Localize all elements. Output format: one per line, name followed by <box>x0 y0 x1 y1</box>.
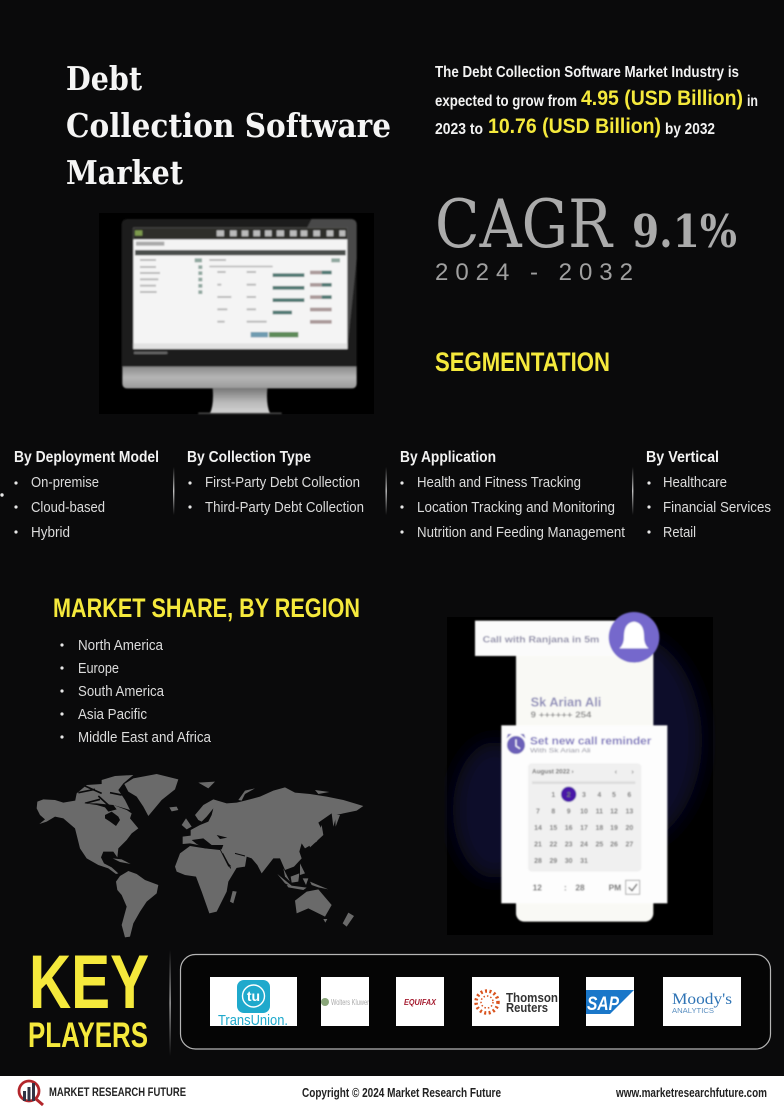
key players heading: PLAYERS <box>28 1016 148 1055</box>
phone reminder image: 9 ++++++ 254 <box>531 709 592 719</box>
market size text block: 10.76 (USD Billion) <box>488 115 661 138</box>
footer brand: MARKET RESEARCH FUTURE <box>49 1085 186 1099</box>
phone reminder image: 4 <box>597 792 601 799</box>
segment: by application: Nutrition and Feeding Management <box>417 524 626 541</box>
phone reminder image: 22 <box>549 842 557 849</box>
market size text block: expected to grow from <box>435 93 577 110</box>
svalbard <box>198 782 215 788</box>
region list: Asia Pacific <box>78 706 147 723</box>
market size text block: The Debt Collection Software Market Industry is <box>435 64 739 81</box>
time picker <box>533 883 621 893</box>
phone reminder image: 18 <box>595 825 603 832</box>
logo: thomson reuters: Reuters <box>506 1001 548 1015</box>
arctic islands <box>75 775 133 810</box>
phone reminder image: 19 <box>610 825 618 832</box>
phone reminder image: › <box>631 767 634 776</box>
key players panel <box>180 954 770 1049</box>
segment: by deployment model: Hybrid <box>31 524 70 541</box>
calendar <box>528 763 641 872</box>
phone reminder image: 16 <box>565 825 573 832</box>
phone reminder image: 26 <box>610 842 618 849</box>
logo: transunion <box>210 977 297 1029</box>
market size text block: 4.95 (USD Billion) <box>581 87 743 110</box>
bell icon <box>609 612 659 663</box>
phone reminder image: 15 <box>549 825 557 832</box>
phone reminder image: 29 <box>549 858 557 865</box>
key players heading: KEY <box>29 940 149 1025</box>
segment: by deployment model <box>0 449 159 541</box>
logo: thomson reuters <box>472 977 559 1026</box>
new zealand <box>343 913 354 927</box>
novaya zemlya <box>238 788 255 801</box>
caribbean <box>113 858 131 864</box>
tasmania <box>323 919 327 923</box>
segment: by collection type <box>187 449 364 516</box>
eurasia <box>183 787 363 873</box>
phone reminder image: 31 <box>580 858 588 865</box>
phone reminder image: 20 <box>625 825 633 832</box>
region list: South America <box>78 683 165 700</box>
alarm icon <box>507 736 525 754</box>
logo: moody's analytics: Moody's <box>672 991 732 1008</box>
CAGR figure: CAGR <box>435 186 614 263</box>
logo: wolters kluwer: Wolters Kluwer <box>331 998 369 1007</box>
phone reminder image: 21 <box>534 842 542 849</box>
north america <box>37 799 138 874</box>
logo: sap: SAP <box>587 994 619 1015</box>
segment: by application <box>400 449 626 541</box>
sakhalin <box>335 815 340 827</box>
phone reminder image: 8 <box>551 808 555 815</box>
hudson bay <box>105 812 120 826</box>
madagascar <box>230 891 237 903</box>
contact name: Sk Arian Ali <box>531 696 601 710</box>
monitor screen <box>133 228 347 349</box>
time picker: 28 <box>575 883 585 893</box>
segment: by application: By Application <box>400 449 496 466</box>
segment: by application: Health and Fitness Tracking <box>417 474 581 491</box>
phone reminder image: 23 <box>565 842 573 849</box>
segment: by vertical: Healthcare <box>663 474 727 491</box>
seas <box>192 835 227 849</box>
title <box>66 59 391 192</box>
market size text block <box>435 64 758 138</box>
region list: Middle East and Africa <box>78 729 212 746</box>
region list: North America <box>78 637 164 654</box>
monitor chin <box>122 367 357 388</box>
title: Collection Software <box>66 106 391 145</box>
world map <box>37 774 363 937</box>
market size text block: in <box>747 93 758 110</box>
phone reminder image: August 2022 › <box>532 770 574 776</box>
phone reminder image: 25 <box>595 842 603 849</box>
heading: segmentation: SEGMENTATION <box>435 347 610 377</box>
heading: market share by region: MARKET SHARE, BY REGION <box>53 593 360 623</box>
CAGR figure: 2024 - 2032 <box>435 259 633 286</box>
region list <box>60 637 212 746</box>
CAGR figure: 9.1% <box>632 205 737 258</box>
phone reminder image: 27 <box>625 842 633 849</box>
segment: by vertical: Retail <box>663 524 696 541</box>
greenland <box>124 774 178 816</box>
logo: transunion: TransUnion. <box>218 1012 288 1029</box>
phone reminder image: 11 <box>596 808 603 815</box>
title: Market <box>66 153 184 192</box>
logo: wolters kluwer <box>321 977 369 1026</box>
logo: moody's analytics: ANALYTICS <box>672 1006 714 1015</box>
segment: by deployment model: By Deployment Model <box>14 449 159 466</box>
phone reminder image: 10 <box>580 808 588 815</box>
logo: equifax <box>396 977 444 1026</box>
footer copyright: Copyright © 2024 Market Research Future <box>302 1086 501 1100</box>
segment: by deployment model: Cloud-based <box>31 499 105 516</box>
phone reminder image: Call with Ranjana in 5m <box>483 635 599 645</box>
reminder card <box>501 725 667 903</box>
logo: sap <box>586 977 634 1026</box>
phone reminder image <box>447 612 713 935</box>
phone reminder image: 24 <box>580 842 588 849</box>
britain <box>182 818 192 829</box>
monitor image <box>99 213 374 414</box>
australia <box>295 889 332 917</box>
monitor bezel <box>122 219 357 367</box>
phone reminder image: 17 <box>580 825 588 832</box>
segment: by vertical: By Vertical <box>646 449 719 466</box>
phone reminder image: 13 <box>625 808 633 815</box>
key players heading <box>28 940 149 1055</box>
logo: thomson reuters: Thomson <box>506 991 558 1005</box>
phone reminder image: 3 <box>582 792 586 799</box>
indonesia and philippines <box>277 863 328 890</box>
phone reminder image: 5 <box>612 792 616 799</box>
south america <box>116 871 158 937</box>
time picker: PM <box>609 883 621 893</box>
phone reminder image: 9 <box>567 808 571 815</box>
phone reminder image: 14 <box>534 825 542 832</box>
phone reminder image: 12 <box>610 808 618 815</box>
malay peninsula <box>283 868 290 882</box>
phone reminder image: 6 <box>627 792 631 799</box>
logo: equifax: EQUIFAX <box>404 998 437 1007</box>
CAGR figure <box>435 186 737 286</box>
segment: by collection type: First-Party Debt Collection <box>205 474 360 491</box>
phone reminder image: Set new call reminder <box>530 735 652 747</box>
region list: Europe <box>78 660 119 677</box>
africa <box>175 846 238 913</box>
phone reminder image: 30 <box>565 858 573 865</box>
time picker: 12 <box>533 883 542 893</box>
iceland <box>169 807 178 811</box>
logo: transunion: tu <box>247 988 260 1004</box>
segment: by deployment model: On-premise <box>31 474 99 491</box>
phone body <box>516 643 653 922</box>
footer <box>0 1076 784 1108</box>
japan <box>308 825 323 847</box>
phone reminder image: With Sk Arian Ali <box>530 748 591 755</box>
monitor stand <box>210 388 270 413</box>
phone reminder image: 28 <box>534 858 542 865</box>
segment: by vertical: Financial Services <box>663 499 771 516</box>
segment: by application: Location Tracking and Monitoring <box>417 499 615 516</box>
segment: by vertical <box>646 449 771 541</box>
east arctic island <box>315 790 329 794</box>
title: Debt <box>66 59 143 98</box>
footer logo icon <box>19 1081 43 1105</box>
market size text block: 2023 to <box>435 121 483 138</box>
segment: by collection type: Third-Party Debt Collection <box>205 499 364 516</box>
logo: moody's analytics <box>663 977 741 1026</box>
phone reminder image: ‹ <box>615 767 618 776</box>
phone reminder image: 1 <box>551 792 555 799</box>
time picker: : <box>564 883 567 893</box>
phone reminder image: 2 <box>567 792 571 799</box>
notification bar <box>475 621 638 656</box>
market size text block: by 2032 <box>665 121 715 138</box>
segment: by collection type: By Collection Type <box>187 449 311 466</box>
phone reminder image: 7 <box>536 808 540 815</box>
